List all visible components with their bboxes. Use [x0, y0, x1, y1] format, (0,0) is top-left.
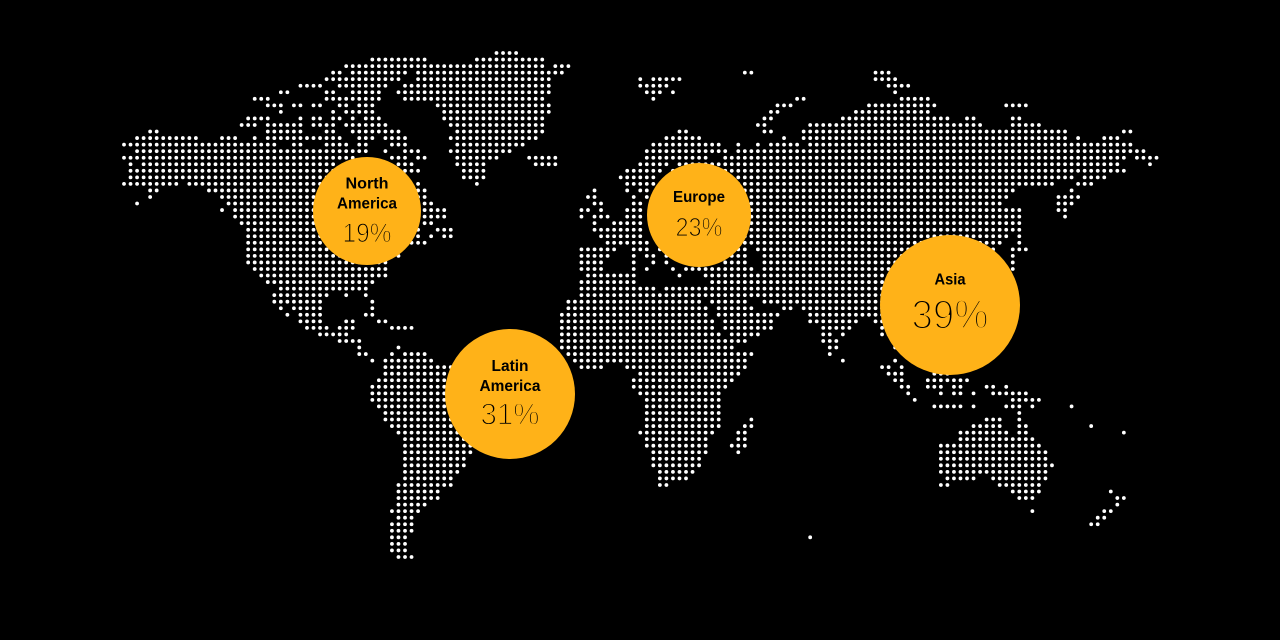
bubble: Latin America 31%: America	[480, 378, 541, 395]
bubble: North America 19%: America	[337, 196, 397, 212]
bubble: Asia 39%: 39%	[912, 292, 988, 338]
bubble: Europe 23%	[647, 163, 751, 267]
bubble: North America 19%	[313, 157, 421, 265]
world dot map	[124, 53, 1157, 557]
bubble: Asia 39%	[880, 235, 1020, 375]
bubble: Asia 39%: Asia	[934, 272, 966, 288]
bubble: Latin America 31%	[445, 329, 575, 459]
bubble: Europe 23%: Europe	[673, 189, 725, 206]
bubble: Latin America 31%: Latin	[492, 358, 528, 375]
bubble: North America 19%: 19%	[342, 218, 392, 248]
bubble: Europe 23%: 23%	[676, 212, 722, 242]
bubble: North America 19%: North	[346, 176, 388, 192]
bubble: Latin America 31%: 31%	[480, 398, 540, 432]
